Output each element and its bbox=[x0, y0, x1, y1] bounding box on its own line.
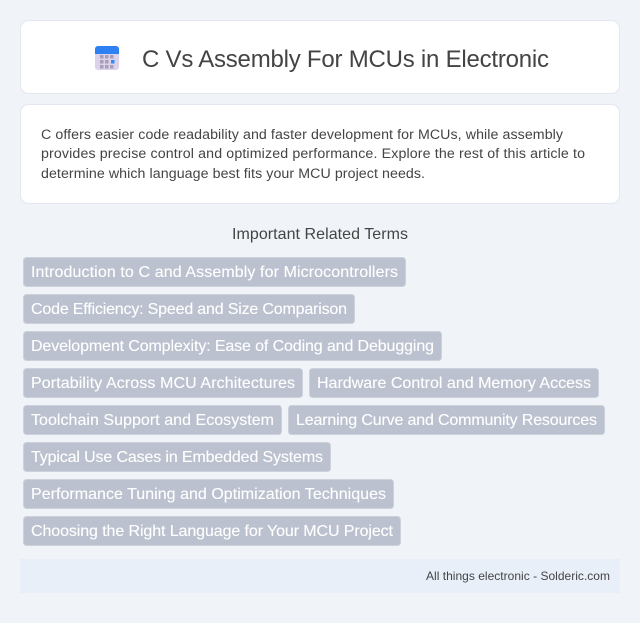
summary text bbox=[41, 127, 585, 182]
summary text: C offers easier code readability and faster development for MCUs, while assembly bbox=[41, 127, 564, 143]
footer bbox=[20, 559, 620, 593]
tag 1: Introduction to C and Assembly for Microcontrollers bbox=[31, 264, 398, 281]
tag 8 bbox=[24, 442, 330, 472]
tag 10 bbox=[24, 516, 400, 546]
tag 3: Development Complexity: Ease of Coding and Debugging bbox=[31, 338, 434, 355]
tag 7: Learning Curve and Community Resources bbox=[296, 412, 597, 429]
tag 3 bbox=[24, 332, 442, 360]
panel: title card bbox=[20, 20, 620, 94]
tag 4 bbox=[24, 368, 302, 398]
tag 6 bbox=[24, 406, 282, 434]
tag 1 bbox=[24, 258, 406, 286]
tag 5 bbox=[310, 368, 598, 398]
tag list bbox=[24, 258, 604, 546]
tag 2: Code Efficiency: Speed and Size Comparison bbox=[31, 301, 347, 318]
heading: related terms: Important Related Terms bbox=[232, 226, 408, 243]
tag 5: Hardware Control and Memory Access bbox=[317, 375, 591, 392]
tag 10: Choosing the Right Language for Your MCU Project bbox=[31, 523, 394, 540]
icon: calendar bbox=[95, 46, 119, 70]
tag 9: Performance Tuning and Optimization Techniques bbox=[31, 486, 386, 503]
summary text: provides precise control and optimized performance. Explore the rest of this article to bbox=[41, 146, 585, 162]
title: C Vs Assembly For MCUs in Electronic bbox=[142, 46, 549, 73]
summary text: determine which language best fits your MCU project needs. bbox=[41, 166, 425, 182]
tag 6: Toolchain Support and Ecosystem bbox=[31, 412, 274, 429]
tag 4: Portability Across MCU Architectures bbox=[31, 375, 295, 392]
panel: summary bbox=[20, 104, 620, 204]
footer text: All things electronic - Solderic.com bbox=[426, 569, 610, 583]
tag 2 bbox=[24, 294, 354, 324]
tag 8: Typical Use Cases in Embedded Systems bbox=[31, 449, 323, 466]
tag 9 bbox=[24, 480, 394, 508]
tag 7 bbox=[288, 406, 604, 434]
